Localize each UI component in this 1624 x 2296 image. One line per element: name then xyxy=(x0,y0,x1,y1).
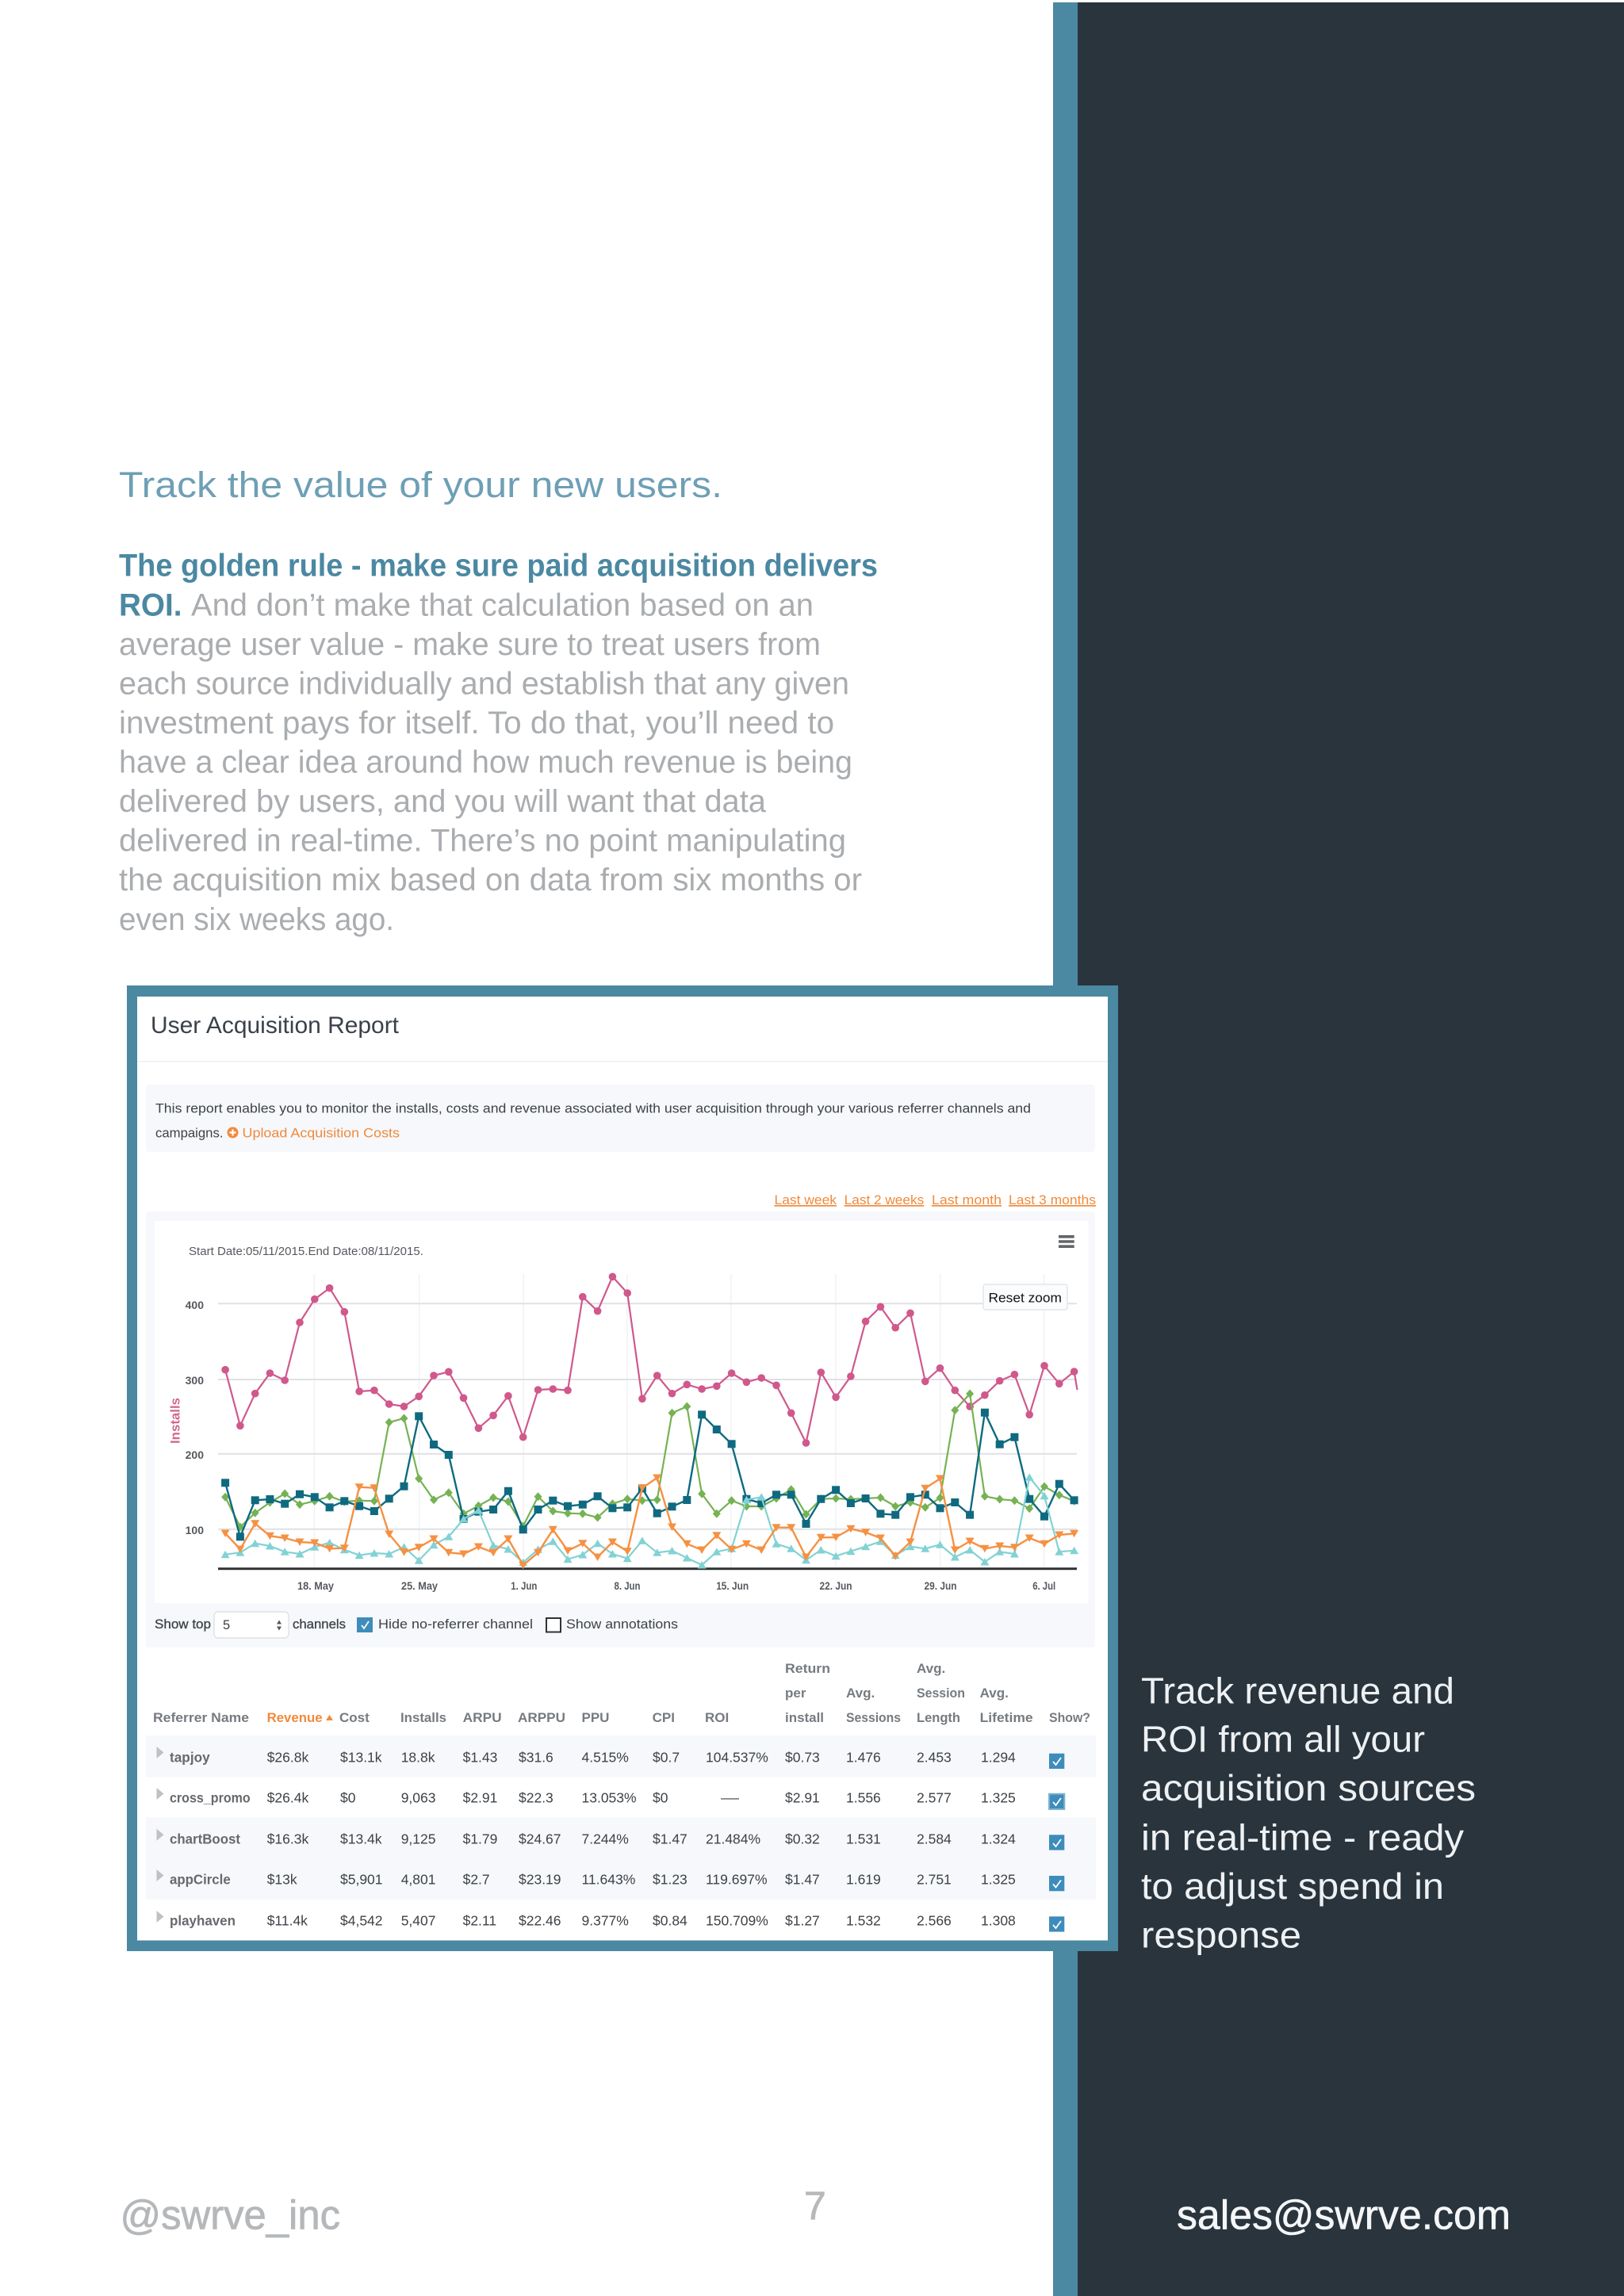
row: appCircle: 11.643% xyxy=(582,1872,635,1888)
date range links: Last 3 months xyxy=(1009,1192,1096,1207)
row: appCircle: $1.47 xyxy=(785,1872,820,1888)
info box: This report enables you to monitor the installs, costs and revenue associated with user acquisition through your various referrer channels and xyxy=(155,1102,1031,1116)
series: pink xyxy=(225,1276,1078,1443)
row: chartBoost: 21.484% xyxy=(706,1831,760,1846)
side callout text: in real-time - ready xyxy=(1141,1816,1464,1858)
footer: email: sales@swrve.com xyxy=(1177,2193,1511,2239)
row: tapjoy: 2.453 xyxy=(917,1749,952,1765)
x axis labels: 15. Jun xyxy=(716,1579,749,1592)
row: chartBoost: $0.32 xyxy=(785,1831,820,1846)
row: chartBoost: $13.4k xyxy=(340,1831,382,1846)
row: cross_promo: cross_promo xyxy=(170,1790,251,1806)
y axis labels: 200 xyxy=(186,1448,204,1461)
table header: Referrer Name xyxy=(153,1710,249,1725)
row: chartBoost: 7.244% xyxy=(582,1831,629,1846)
body text block: even six weeks ago. xyxy=(119,902,394,937)
body text block: have a clear idea around how much revenue is being xyxy=(119,744,852,779)
body text block xyxy=(119,549,878,937)
body text block: And don’t make that calculation based on an xyxy=(191,587,814,622)
table header: PPU xyxy=(582,1710,609,1725)
info box: campaigns. xyxy=(155,1126,224,1140)
series: light teal xyxy=(225,1477,1074,1565)
x axis labels: 8. Jun xyxy=(614,1579,641,1592)
channel controls row: Show top xyxy=(155,1617,211,1632)
y axis labels: Installs xyxy=(168,1398,182,1444)
row: playhaven: $4,542 xyxy=(340,1912,383,1928)
table header: CPI xyxy=(653,1710,675,1725)
table header: Sessions xyxy=(846,1710,901,1725)
row: tapjoy: 104.537% xyxy=(706,1749,768,1765)
y axis labels xyxy=(168,1299,204,1536)
y axis labels: 400 xyxy=(186,1299,204,1311)
table header: Lifetime xyxy=(980,1710,1033,1725)
side callout text: response xyxy=(1141,1915,1301,1956)
row: cross_promo xyxy=(157,1788,1064,1809)
x axis labels xyxy=(297,1579,1055,1592)
row: tapjoy: tapjoy xyxy=(170,1749,210,1765)
row: playhaven: playhaven xyxy=(170,1912,236,1928)
row: tapjoy: $31.6 xyxy=(519,1749,553,1765)
data table xyxy=(146,1661,1096,1932)
date range links: Last month xyxy=(932,1192,1002,1207)
channel controls row: 5 xyxy=(223,1618,230,1632)
row: tapjoy: $0.73 xyxy=(785,1749,820,1765)
table header: Cost xyxy=(339,1710,370,1725)
row: chartBoost xyxy=(157,1829,1064,1850)
row: playhaven: $2.11 xyxy=(463,1912,496,1928)
icon: chart menu xyxy=(1059,1237,1074,1246)
report white sheet xyxy=(137,997,1108,1941)
row: chartBoost: $16.3k xyxy=(267,1831,308,1846)
row: playhaven: $0.84 xyxy=(653,1912,688,1928)
row: appCircle: $1.23 xyxy=(653,1872,688,1888)
body text block: delivered by users, and you will want that data xyxy=(119,784,767,819)
side callout text: ROI from all your xyxy=(1141,1718,1425,1759)
row: chartBoost: $24.67 xyxy=(519,1831,561,1846)
x axis labels: 29. Jun xyxy=(925,1579,956,1592)
row: cross_promo: $2.91 xyxy=(785,1790,820,1806)
table header: Installs xyxy=(400,1710,446,1725)
report title: User Acquisition Report xyxy=(151,1012,400,1039)
row: playhaven: $11.4k xyxy=(267,1912,308,1928)
series: green xyxy=(225,1394,1074,1527)
row: cross_promo: 1.325 xyxy=(981,1790,1016,1806)
x axis labels: 18. May xyxy=(297,1579,334,1592)
panel: user acquisition report screenshot xyxy=(127,985,1118,1951)
row: tapjoy: 1.294 xyxy=(981,1749,1016,1765)
body text block: average user value - make sure to treat users from xyxy=(119,627,821,662)
y axis labels: 100 xyxy=(186,1524,204,1536)
row: appCircle: $2.7 xyxy=(463,1872,490,1888)
table header: per xyxy=(785,1686,806,1701)
table row stripes xyxy=(146,1735,1096,1900)
table header xyxy=(153,1661,1090,1725)
info box: Upload Acquisition Costs xyxy=(243,1126,400,1140)
side callout text xyxy=(1141,1670,1476,1956)
body text block: investment pays for itself. To do that, you’ll need to xyxy=(119,706,834,740)
row: playhaven: 1.308 xyxy=(981,1912,1016,1928)
row: appCircle: 2.751 xyxy=(917,1872,952,1888)
x axis labels: 6. Jul xyxy=(1032,1579,1055,1592)
row: playhaven xyxy=(157,1911,1064,1932)
teal vertical strip xyxy=(1053,2,1078,2296)
row: cross_promo: $2.91 xyxy=(463,1790,497,1806)
table header: install xyxy=(785,1710,824,1725)
body text block: delivered in real-time. There’s no point manipulating xyxy=(119,823,846,858)
row: cross_promo: — xyxy=(721,1790,740,1806)
series: dark teal xyxy=(225,1413,1074,1536)
reset zoom button xyxy=(983,1284,1067,1310)
row: cross_promo: 9,063 xyxy=(401,1790,435,1806)
row: cross_promo: 13.053% xyxy=(582,1790,637,1806)
table header: Avg. xyxy=(980,1686,1009,1701)
series: orange xyxy=(225,1478,1074,1565)
row: tapjoy: 1.476 xyxy=(846,1749,881,1765)
side callout text: to adjust spend in xyxy=(1141,1866,1444,1907)
x axis labels: 1. Jun xyxy=(511,1579,537,1592)
row: cross_promo: $22.3 xyxy=(519,1790,553,1806)
row: chartBoost: 2.584 xyxy=(917,1831,952,1846)
table header: Avg. xyxy=(917,1661,945,1676)
row: cross_promo: $0 xyxy=(340,1790,356,1806)
side callout text: acquisition sources xyxy=(1141,1767,1476,1808)
line chart: installs by channel: Start Date:05/11/2015.End Date:08/11/2015. xyxy=(189,1245,423,1258)
date range links: Last 2 weeks xyxy=(845,1192,924,1207)
row: appCircle: 1.619 xyxy=(846,1872,881,1888)
info box xyxy=(146,1085,1095,1152)
row: appCircle: $13k xyxy=(267,1872,297,1888)
row: chartBoost: 1.531 xyxy=(846,1831,881,1846)
row: playhaven: $1.27 xyxy=(785,1912,820,1928)
side callout text: Track revenue and xyxy=(1141,1670,1454,1711)
line chart: installs by channel xyxy=(155,1221,1088,1603)
x axis labels: 25. May xyxy=(401,1579,438,1592)
footer: page number: 7 xyxy=(804,2183,826,2228)
channel controls row: channels xyxy=(293,1617,346,1632)
row: appCircle: appCircle xyxy=(170,1872,231,1888)
table header: Avg. xyxy=(846,1686,875,1701)
report frame xyxy=(127,985,1118,1951)
row: playhaven: $22.46 xyxy=(519,1912,561,1928)
row: cross_promo: 1.556 xyxy=(846,1790,881,1806)
row: cross_promo: $0 xyxy=(653,1790,668,1806)
dark side panel xyxy=(1078,2,1624,2296)
body text block: each source individually and establish that any given xyxy=(119,666,849,701)
chart well xyxy=(146,1211,1095,1647)
date range links: Last week xyxy=(774,1192,837,1207)
row: appCircle xyxy=(157,1869,1064,1891)
row: playhaven: 150.709% xyxy=(706,1912,768,1928)
row: appCircle: $23.19 xyxy=(519,1872,561,1888)
row: chartBoost: $1.47 xyxy=(653,1831,688,1846)
row: chartBoost: 9,125 xyxy=(401,1831,435,1846)
row: playhaven: 9.377% xyxy=(582,1912,629,1928)
table header: ROI xyxy=(705,1710,729,1725)
table header: ARPU xyxy=(463,1710,502,1725)
row: tapjoy: $1.43 xyxy=(463,1749,497,1765)
row: chartBoost: 1.324 xyxy=(981,1831,1016,1846)
channel controls row: Show annotations xyxy=(566,1617,678,1632)
footer: twitter handle: @swrve_inc xyxy=(121,2193,340,2239)
date range links xyxy=(774,1192,1096,1207)
table header: ARPPU xyxy=(518,1710,565,1725)
row: playhaven: 2.566 xyxy=(917,1912,952,1928)
heading: Track the value of your new users. xyxy=(119,465,722,505)
row: chartBoost: $1.79 xyxy=(463,1831,497,1846)
row: tapjoy xyxy=(157,1747,1064,1769)
body text block: The golden rule - make sure paid acquisition delivers xyxy=(119,549,878,584)
table header: Revenue xyxy=(267,1710,323,1725)
channel controls row xyxy=(155,1612,678,1638)
row: appCircle: $5,901 xyxy=(340,1872,383,1888)
row: tapjoy: 18.8k xyxy=(401,1749,435,1765)
row: tapjoy: $0.7 xyxy=(653,1749,680,1765)
row: playhaven: 5,407 xyxy=(401,1912,435,1928)
row: playhaven: 1.532 xyxy=(846,1912,881,1928)
row: cross_promo: 2.577 xyxy=(917,1790,952,1806)
body text block: the acquisition mix based on data from six months or xyxy=(119,863,862,897)
table header: Length xyxy=(917,1710,960,1725)
row: tapjoy: 4.515% xyxy=(582,1749,629,1765)
table header: Return xyxy=(785,1661,830,1676)
row: appCircle: 1.325 xyxy=(981,1872,1016,1888)
x axis labels: 22. Jun xyxy=(820,1579,852,1592)
row: appCircle: 119.697% xyxy=(706,1872,768,1888)
row: cross_promo: $26.4k xyxy=(267,1790,308,1806)
row: appCircle: 4,801 xyxy=(401,1872,435,1888)
body text block: ROI. xyxy=(119,587,182,622)
table header: Session xyxy=(917,1686,965,1701)
table header: Show? xyxy=(1049,1710,1090,1725)
row: tapjoy: $13.1k xyxy=(340,1749,382,1765)
y axis labels: 300 xyxy=(186,1374,204,1387)
row: tapjoy: $26.8k xyxy=(267,1749,308,1765)
row: chartBoost: chartBoost xyxy=(170,1831,240,1846)
reset zoom button: Reset zoom xyxy=(988,1291,1062,1306)
channel controls row: Hide no-referrer channel xyxy=(378,1617,533,1632)
